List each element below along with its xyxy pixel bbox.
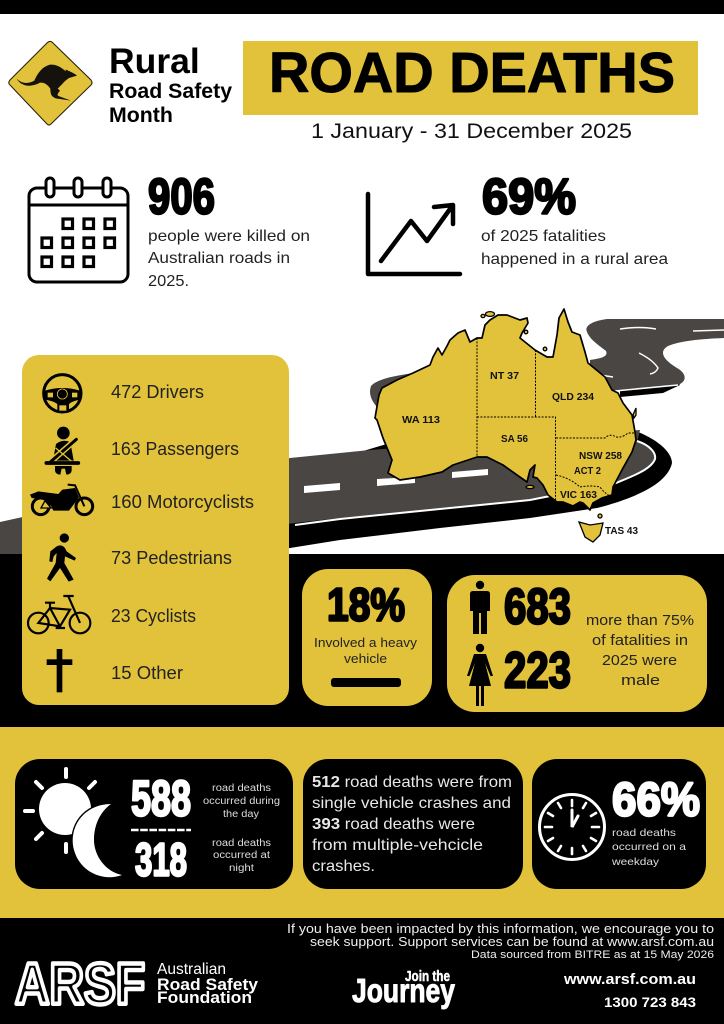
panel: day versus night: the day [223,809,259,820]
panel: gender split: more than 75% [586,613,694,629]
map: state labels: VIC 163 [560,489,597,501]
map of Australia with state road deaths [375,309,638,542]
panel: gender split: 223 [504,642,571,698]
yellow band [0,727,724,918]
panel: day versus night: road deaths [212,783,271,794]
icon: sun and moon [25,769,122,877]
stat: 69% rural: 69% [482,168,576,224]
panel: day versus night: 588 [131,770,191,826]
map: mainland outline [375,309,636,510]
panel: weekday stat [532,759,706,889]
stat: 906 killed: 2025. [148,273,189,290]
icon: male figure [470,581,490,634]
date range: 1 January - 31 December 2025 [311,120,632,143]
logo: kangaroo warning sign [9,41,92,125]
map: islands [481,312,636,542]
stat: 906 killed: Australian roads in [148,250,290,267]
list labels: 160 Motorcyclists [111,492,254,512]
panel: day versus night [15,759,293,889]
panel: single versus multiple vehicle crashes: crashes. [312,858,375,875]
panel: single versus multiple vehicle crashes [303,759,523,889]
logo wordmark: Rural Road Safety Month [109,41,232,127]
list labels: 163 Passengers [111,439,239,459]
panel: heavy vehicle stat [302,569,432,706]
panel: gender split [447,575,707,712]
panel: road user breakdown [22,355,289,705]
map: state labels: NT 37 [490,370,519,382]
panel: day versus night: road deaths [212,838,271,849]
winding road illustration [0,319,724,570]
map: state labels: WA 113 [402,414,440,426]
stat: 906 killed [148,168,310,290]
logo: Australian Road Safety Foundation wordmark: Australian [157,961,226,978]
stat: 69% rural [481,168,668,268]
top black bar [0,0,724,14]
map: state labels: TAS 43 [605,525,638,537]
panel: weekday stat: occurred on a [612,841,686,853]
icon: calendar [29,178,128,282]
map: state labels: SA 56 [501,433,528,445]
panel: weekday stat: weekday [611,856,660,868]
panel: heavy vehicle stat: vehicle [344,651,387,666]
panel: day versus night: occurred during [203,796,280,807]
stat: 906 killed: 906 [148,168,215,224]
logo: Australian Road Safety Foundation wordmark: Foundation [157,988,252,1007]
map: state borders [477,338,636,502]
list labels [111,382,254,683]
icon: rising line chart [368,194,460,274]
map: state labels: ACT 2 [574,465,601,477]
contact details: 1300 723 843 [604,994,696,1010]
icon: clock [540,794,604,860]
contact details [563,971,696,1010]
stat: 906 killed: people were killed on [148,228,310,245]
stat: 69% rural: happened in a rural area [481,251,668,268]
panel: weekday stat: 66% [612,772,700,826]
list labels: 23 Cyclists [111,606,196,626]
logo wordmark: Rural Road Safety Month: Rural [109,41,200,81]
icon: passenger with seatbelt [46,427,78,475]
panel: gender split: 683 [504,578,571,634]
panel: weekday stat: road deaths [612,827,676,839]
list labels: 73 Pedestrians [111,548,232,568]
panel: gender split: of fatalities in [592,633,688,649]
logo: Join the Journey: Join the [405,968,450,985]
icon: cross [47,649,72,692]
footer support message: seek support. Support services can be found at www.arsf.com.au [310,935,714,949]
panel: day versus night: 318 [135,834,187,886]
panel: day versus night: occurred at [213,850,270,861]
footer support message: Data sourced from BITRE as at 15 May 2026 [471,949,714,961]
stat: 69% rural: of 2025 fatalities [481,228,606,245]
list labels: 472 Drivers [111,382,204,402]
panel: heavy vehicle stat: 18% [327,578,405,630]
panel: gender split: 2025 were [602,653,677,669]
logo: Join the Journey: Journey [352,972,456,1009]
icon: heavy vehicle bar [331,678,401,687]
footer support message: If you have been impacted by this information, we encourage you to [287,922,714,936]
panel: gender split: male [621,673,660,689]
black band behind stat cards [0,554,724,727]
footer band [0,918,724,1024]
logo wordmark: Rural Road Safety Month: Road Safety [109,79,232,103]
logo: Australian Road Safety Foundation wordmark [157,961,259,1007]
map: state labels: NSW 258 [579,450,622,462]
map: state labels [402,370,638,537]
panel: single versus multiple vehicle crashes: 393 road deaths were [312,816,475,833]
panel: heavy vehicle stat: Involved a heavy [314,635,418,650]
icon: steering wheel [44,375,81,413]
logo wordmark: Rural Road Safety Month: Month [109,103,173,127]
icon: motorcycle [30,485,93,515]
icon: pedestrian [47,533,76,582]
panel: single versus multiple vehicle crashes: single vehicle crashes and [312,795,511,812]
logo: Australian Road Safety Foundation wordmark: Road Safety [157,975,259,994]
footer support message [287,922,714,961]
list labels: 15 Other [111,663,183,683]
panel: single versus multiple vehicle crashes: from multiple-vehcicle [312,837,483,854]
contact details: www.arsf.com.au [563,971,696,988]
logo: ARSF mark: ARSF [15,952,145,1017]
icon: female figure [467,644,493,706]
icon: bicycle [28,596,90,633]
panel: single versus multiple vehicle crashes: 512 road deaths were from [312,774,512,791]
title banner: ROAD DEATHS [269,41,675,104]
map: state labels: QLD 234 [552,391,594,403]
panel: day versus night: night [229,863,254,874]
